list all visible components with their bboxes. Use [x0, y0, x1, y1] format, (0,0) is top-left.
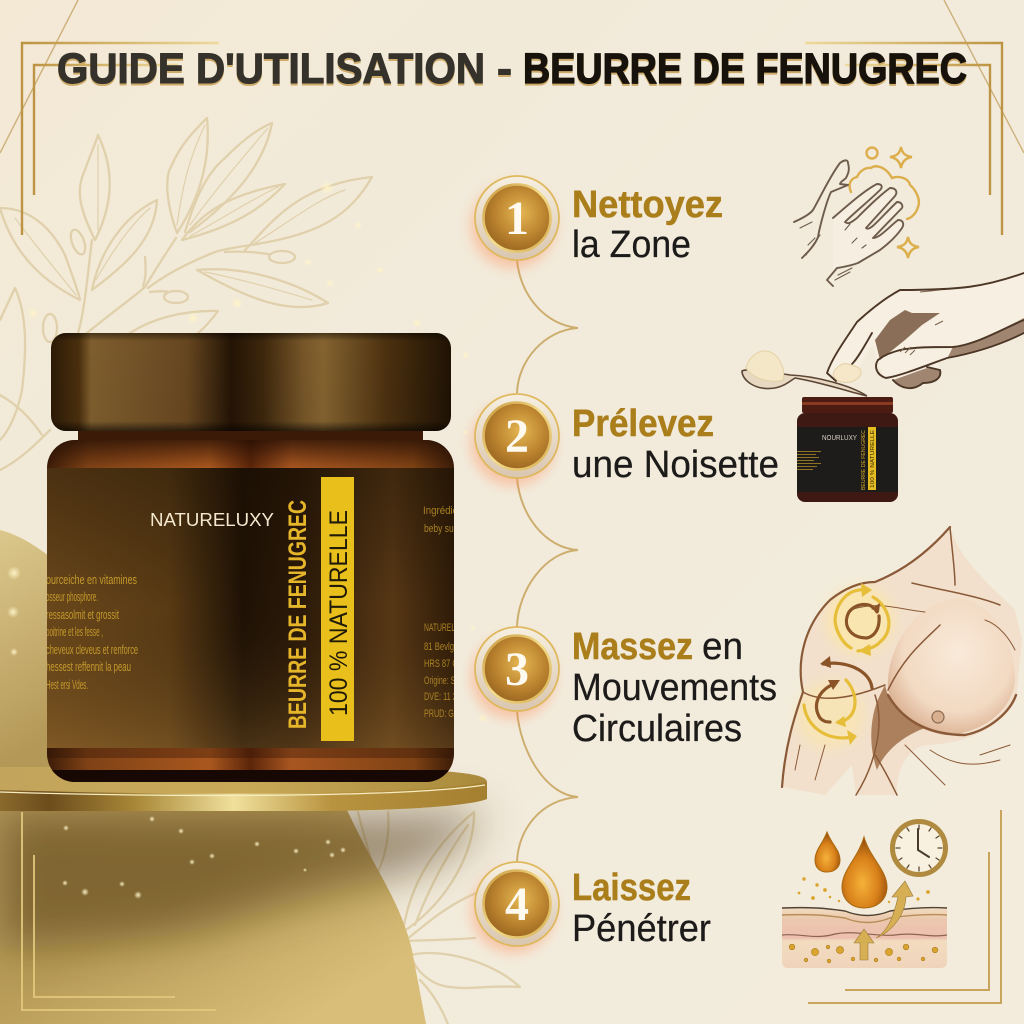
- jar label: [46, 468, 472, 748]
- botanical line art: upper branch: [0, 118, 372, 470]
- yellow band: 100 % NATURELLE: [325, 510, 353, 716]
- rising arrows: [854, 881, 913, 960]
- skin cross-section: [782, 908, 947, 968]
- right label text: beby surrisin: [424, 523, 472, 535]
- connector lines between steps: [517, 260, 795, 862]
- left label text: [46, 572, 138, 692]
- jar lid: [51, 333, 451, 431]
- step 3 text: en: [702, 626, 743, 668]
- right label text: PRUD: GNAD: [424, 708, 469, 720]
- clock: [892, 822, 946, 874]
- oil drops: [815, 832, 887, 908]
- step 1 text: la Zone: [572, 224, 691, 266]
- step 1 badge: 1: [505, 192, 529, 245]
- mini jar: BEURRE DE FENUGREC: [861, 430, 867, 490]
- right label text: HRS 87 Grad: [424, 658, 469, 670]
- icon: chest massage: [782, 527, 1022, 795]
- step 3 text: [572, 626, 777, 750]
- title: BEURRE DE FENUGREC: [523, 45, 967, 93]
- icon: oil penetrating skin with clock: [782, 822, 947, 968]
- step 2 badge: [471, 394, 559, 486]
- product jar: [46, 333, 472, 782]
- right label text: Ingrédients: [423, 505, 471, 517]
- right label text: DVE: 11 2026: [424, 691, 469, 703]
- step 4 text: Pénétrer: [572, 908, 711, 950]
- step 2 text: [572, 403, 779, 486]
- mini jar: [797, 397, 898, 502]
- title: -: [497, 45, 512, 93]
- step 4 text: [572, 867, 711, 950]
- step 1 badge: [471, 176, 559, 268]
- step 4 badge: [471, 862, 559, 953]
- gold swoosh backdrop: [0, 530, 426, 1024]
- left label text: hessest reffennit la peau: [46, 659, 131, 674]
- step 3 badge: [471, 627, 559, 719]
- right label text: NATURELUXY: [424, 622, 469, 634]
- left label text: cheveux cleveus et renforce: [46, 642, 138, 657]
- step 1 text: [572, 184, 723, 266]
- droplets: [798, 877, 930, 903]
- step 3 text: Mouvements: [572, 667, 777, 709]
- step 2 text: Prélevez: [572, 403, 714, 445]
- massage arrows: [804, 590, 889, 738]
- shelf cast shadow: [0, 812, 487, 950]
- jar neck: [78, 428, 423, 448]
- botanical line art: lower branch: [358, 812, 520, 1024]
- title: [57, 45, 967, 93]
- right label text: [424, 506, 454, 717]
- step 2 badge: 2: [505, 410, 529, 463]
- sparkle particles: [7, 181, 488, 899]
- title: GUIDE D'UTILISATION: [57, 45, 485, 93]
- right label text: Origine: Stand: [424, 675, 469, 687]
- left label text: Hest ersi Vdes.: [46, 677, 88, 692]
- icon: washing hands: [794, 147, 919, 286]
- butter on fingertip: [833, 364, 861, 383]
- left label text: osseur phosphore.: [46, 589, 98, 604]
- step 1 text: Nettoyez: [572, 184, 723, 226]
- product name vertical: BEURRE DE FENUGREC: [284, 500, 312, 729]
- brand name: NATURELUXY: [150, 510, 274, 530]
- mini jar: NOURLUXY: [822, 433, 857, 442]
- left label text: poitrine et les fesse ,: [46, 624, 103, 639]
- step 3 badge: 3: [505, 643, 529, 696]
- step 2 text: une Noisette: [572, 444, 779, 486]
- step 3 text: Circulaires: [572, 708, 742, 750]
- jar glass body: [47, 440, 454, 782]
- left label text: ourceiche en vitamines: [46, 572, 137, 587]
- right label text: 81 Bevlg Gro: [424, 641, 469, 653]
- mini jar: 100 % NATURELLE: [870, 430, 876, 488]
- icon: hand scooping butter: [742, 273, 1024, 502]
- step 4 text: Laissez: [572, 867, 691, 909]
- step 4 badge: 4: [505, 878, 529, 931]
- step 3 text: Massez: [572, 626, 693, 668]
- leaf veins: [15, 125, 345, 300]
- left label text: ressasolmit et grossit: [46, 607, 119, 622]
- butter spoon: [742, 351, 867, 396]
- gold shelf: [0, 767, 487, 811]
